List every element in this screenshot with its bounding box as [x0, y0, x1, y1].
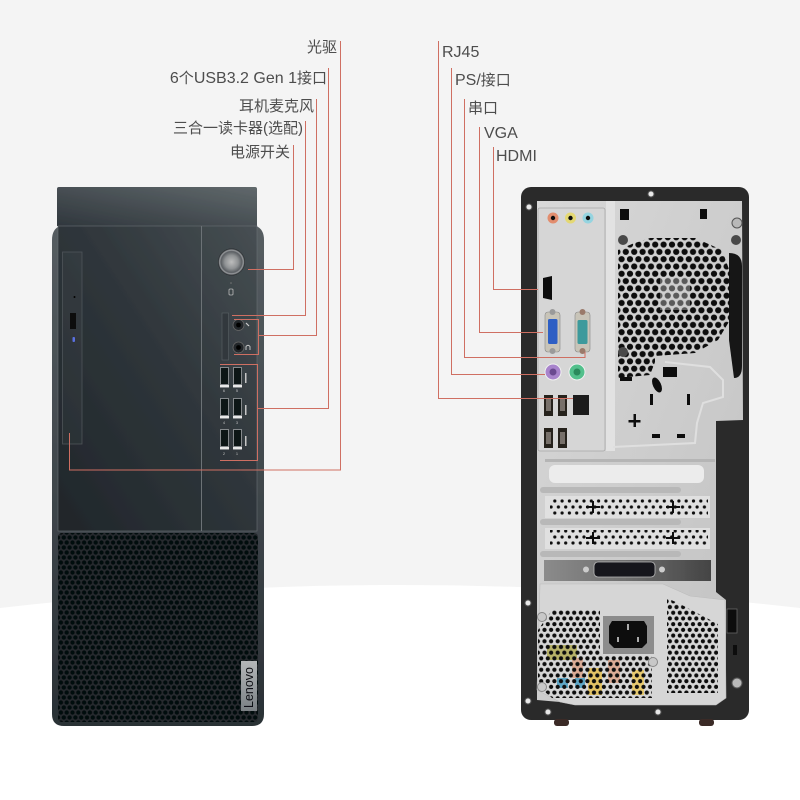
rear chassis black frame — [521, 187, 749, 720]
PSU main perforation — [538, 610, 652, 700]
audio jacks — [548, 212, 594, 224]
callout: PS/2 — [452, 68, 545, 374]
rear feet — [554, 719, 714, 726]
six USB ports: 3 — [236, 421, 238, 425]
callout lines for the front ports — [70, 41, 340, 470]
callout: serial port — [464, 99, 585, 358]
callout: optical drive — [70, 41, 340, 470]
frame screw holes — [525, 191, 742, 715]
label: serial port: 串口 — [468, 100, 498, 117]
front panel — [58, 226, 257, 531]
label: optical drive: 光驱 — [307, 39, 337, 56]
Lenovo badge: Lenovo — [242, 667, 256, 708]
callout: VGA — [480, 127, 543, 332]
card reader slot — [222, 313, 228, 360]
expansion slot three perforated — [540, 528, 710, 557]
PSU screws — [538, 612, 658, 692]
optical drive bay — [62, 252, 82, 444]
power button — [218, 248, 245, 276]
six USB ports: 2 — [223, 452, 225, 456]
callout: headset jacks — [234, 99, 316, 354]
fan screws — [618, 235, 741, 357]
RJ45 port — [573, 395, 589, 415]
six USB ports — [220, 367, 246, 456]
rear view of the tower — [521, 187, 749, 726]
label: VGA: VGA — [484, 125, 518, 142]
IO plate — [538, 208, 605, 451]
six USB ports: 5 — [236, 389, 238, 393]
right column lower black strip — [716, 421, 749, 591]
label: PS/2: PS/接口 — [455, 72, 511, 89]
six USB ports: 4 — [223, 421, 225, 425]
headphone jack — [233, 342, 250, 353]
callout: RJ45 — [438, 41, 573, 398]
VGA port — [545, 309, 560, 354]
embossed plate outline — [613, 362, 723, 447]
label: card reader: 三合一读卡器(选配) — [173, 120, 303, 137]
panel divider — [201, 226, 202, 531]
perforated lower grille — [58, 533, 258, 722]
label: six USB ports: 6个USB3.2 Gen 1接口 — [170, 70, 327, 87]
PS/2 ports — [545, 364, 585, 380]
callout lines for the rear ports — [438, 41, 585, 398]
right side black handle slot — [729, 253, 742, 378]
silver back plate — [537, 201, 743, 705]
six USB ports: 6 — [223, 389, 225, 393]
serial port — [575, 309, 590, 354]
PSU side perforation — [667, 596, 718, 694]
fan perforation — [618, 238, 730, 378]
front tower top cap — [57, 187, 257, 226]
callout: HDMI — [494, 147, 538, 290]
label: headset and microphone: 耳机麦克风 — [239, 98, 314, 115]
front view of the tower — [52, 187, 264, 726]
power supply housing — [537, 584, 726, 705]
coloured cables behind PSU grille — [547, 645, 644, 695]
label: HDMI: HDMI — [496, 148, 537, 165]
label: power switch: 电源开关 — [230, 144, 290, 161]
background: white curved floor — [0, 585, 800, 800]
parallel port card — [544, 560, 711, 581]
expansion slot one — [540, 459, 715, 493]
rear USB ports — [544, 395, 567, 448]
front tower chassis — [52, 226, 264, 726]
AC power socket — [603, 616, 654, 654]
callout: six USB ports — [220, 68, 328, 460]
side lock slots — [727, 609, 737, 655]
HDMI port — [543, 276, 552, 300]
six USB ports: 1 — [236, 452, 238, 456]
microphone jack — [233, 320, 249, 330]
callout: card reader — [232, 121, 306, 316]
callout: power switch — [248, 145, 294, 270]
small chassis cut-outs — [620, 209, 707, 438]
expansion slot two perforated — [540, 496, 710, 525]
vertical channel beside the IO plate — [606, 201, 615, 451]
label: RJ45: RJ45 — [442, 44, 479, 61]
drive indicator icon — [229, 282, 233, 295]
